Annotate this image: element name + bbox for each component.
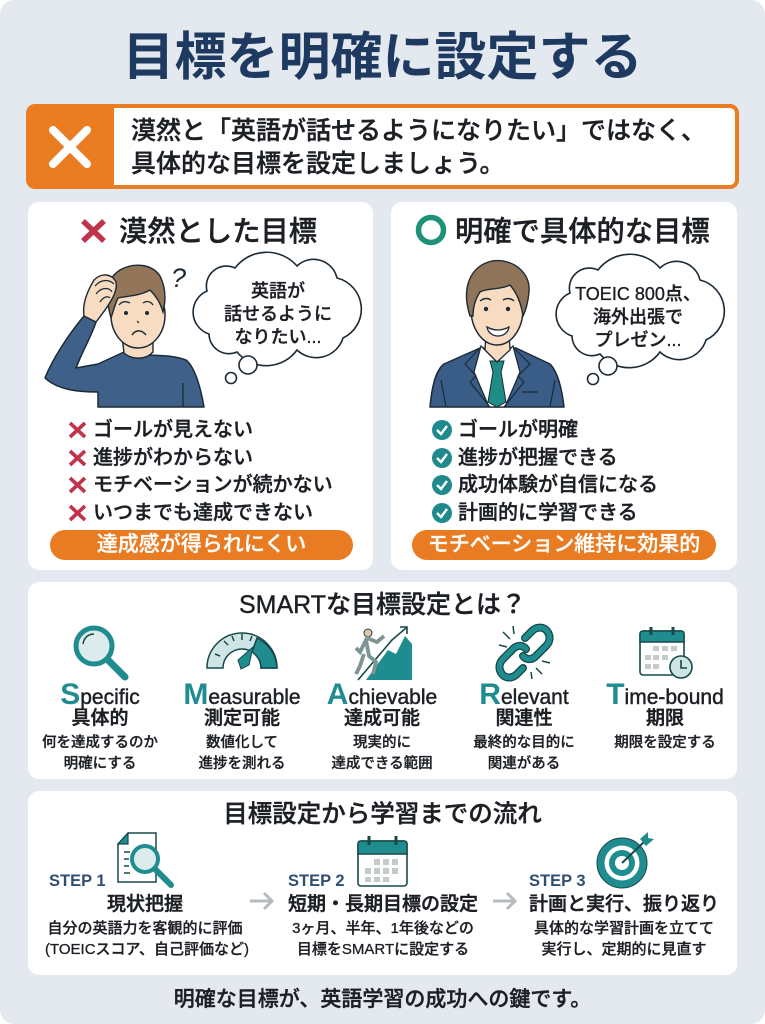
icon: green circle: [416, 214, 446, 246]
description: 明確にする: [64, 756, 136, 772]
step 3 title: 計画と実行、振り返り: [529, 894, 719, 915]
step 2 description: 目標をSMARTに設定する: [297, 940, 469, 958]
step 2 title: 短期・長期目標の設定: [288, 894, 478, 915]
icon: gauge: [206, 632, 278, 670]
list item: モチベーションが続かない: [93, 474, 333, 496]
callout icon: white cross on orange: [30, 108, 114, 185]
illustration: confident businessman: [429, 260, 565, 408]
description: 最終的な目的に: [473, 735, 575, 751]
bubble text: なりたい...: [234, 327, 322, 347]
japanese term: 達成可能: [344, 708, 420, 729]
step 1 description: [45, 920, 249, 958]
callout text: 漠然と「英語が話せるようになりたい」ではなく、: [131, 117, 706, 145]
description: [473, 734, 575, 772]
icon: calendar with clock: [639, 627, 693, 679]
panel heading: 明確で具体的な目標: [455, 215, 710, 247]
list item: 進捗が把握できる: [458, 447, 618, 469]
result pill: モチベーション維持に効果的: [428, 533, 700, 556]
word: Achievable: [327, 678, 437, 711]
step 1 label: STEP 1: [49, 872, 106, 890]
word: Time-bound: [606, 678, 724, 711]
list item: いつまでも達成できない: [93, 502, 313, 524]
japanese term: 測定可能: [204, 708, 280, 729]
list item: 成功体験が自信になる: [458, 474, 658, 496]
callout: intro message: [26, 104, 739, 189]
arrow: [250, 892, 274, 910]
thought bubble: [555, 254, 726, 386]
bubble text: [575, 284, 701, 350]
thought bubble: [192, 252, 362, 384]
step 2 description: [292, 920, 474, 958]
list item: 計画的に学習できる: [458, 502, 638, 524]
word: Specific: [60, 678, 140, 711]
step 1 title: 現状把握: [107, 894, 183, 915]
callout text: 具体的な目標を設定しましょう。: [131, 150, 505, 178]
step 2 description: 3ヶ月、半年、1年後などの: [292, 920, 474, 937]
bubble text: 英語が: [251, 281, 305, 301]
bubble text: 海外出張で: [593, 307, 683, 327]
description: [42, 734, 158, 772]
list item: ゴールが明確: [458, 419, 578, 441]
result pill: [412, 530, 716, 560]
icon: target with arrow: [596, 832, 654, 888]
description: 何を達成するのか: [42, 735, 158, 751]
description: 達成できる範囲: [331, 756, 433, 772]
SMART item: Time-bound: [606, 627, 724, 751]
SMART item: Specific: [42, 626, 158, 772]
icon: calendar: [357, 836, 408, 887]
panel: flow: [28, 791, 737, 975]
description: 関連がある: [488, 756, 560, 772]
flow heading: 目標設定から学習までの流れ: [223, 801, 542, 828]
panel: vague goal: [28, 202, 373, 570]
step 3 description: 具体的な学習計画を立てて: [534, 920, 714, 937]
icon: red cross: [81, 219, 106, 243]
step 2 label: STEP 2: [288, 872, 345, 890]
result pill: 達成感が得られにくい: [97, 533, 306, 556]
icon: document with magnifier: [116, 832, 174, 888]
arrow: [493, 892, 517, 910]
title: 目標を明確に設定する: [122, 29, 642, 87]
word: Measurable: [183, 678, 301, 711]
list: problems: [68, 418, 333, 524]
panel: clear goal: [391, 202, 737, 570]
list item: ゴールが見えない: [93, 419, 253, 441]
description: 期限を設定する: [614, 735, 716, 751]
check icons: [432, 420, 452, 523]
description: 数値化して: [206, 735, 278, 751]
icon: climber and mountain: [354, 626, 412, 680]
callout text: [131, 117, 706, 178]
description: [198, 734, 286, 772]
illustration: confused man: ?: [171, 263, 186, 293]
cross icons: [68, 422, 86, 522]
step 3 label: STEP 3: [529, 872, 586, 890]
description: [331, 734, 433, 772]
japanese term: 期限: [646, 708, 684, 729]
SMART item: Achievable: [327, 626, 437, 772]
step 1 description: 自分の英語力を客観的に評価: [47, 920, 242, 937]
description: 進捗を測れる: [198, 756, 286, 772]
result pill: [50, 530, 353, 560]
footer message: 明確な目標が、英語学習の成功への鍵です。: [174, 988, 591, 1011]
bubble text: [224, 281, 332, 347]
bubble text: TOEIC 800点、: [575, 284, 701, 304]
SMART item: Relevant: [473, 624, 575, 772]
bubble text: プレゼン...: [594, 330, 682, 350]
bubble text: 話せるように: [224, 304, 332, 324]
step 1 description: (TOEICスコア、自己評価など): [45, 940, 249, 958]
SMART item: Measurable: [183, 632, 301, 772]
panel: SMART: [28, 582, 737, 779]
list item: 進捗がわからない: [93, 447, 253, 469]
description: 現実的に: [353, 735, 411, 751]
word: Relevant: [479, 678, 569, 711]
panel heading: 漠然とした目標: [119, 215, 317, 247]
step 3 description: [534, 920, 714, 958]
step 3 description: 実行し、定期的に見直す: [541, 940, 706, 958]
icon: chain link: [495, 624, 554, 682]
list: benefits: [432, 418, 658, 524]
japanese term: 具体的: [71, 708, 128, 729]
illustration: confused man: [44, 263, 205, 408]
japanese term: 関連性: [495, 708, 552, 729]
SMART heading: SMARTな目標設定とは？: [239, 591, 526, 619]
icon: magnifier: [74, 626, 128, 680]
